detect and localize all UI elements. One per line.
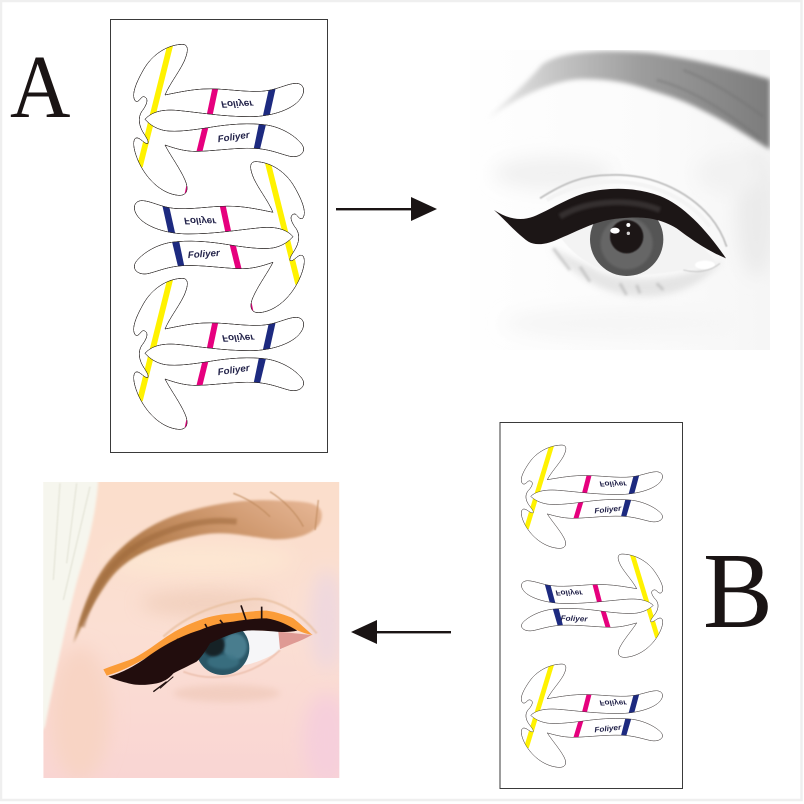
eyelid crease (163, 599, 317, 637)
stencil pair A2 (134, 161, 304, 316)
stencil pair A1: Foliyer (217, 130, 252, 145)
eyelid crease (540, 175, 727, 247)
eyebrow (487, 51, 770, 149)
shading (740, 184, 770, 266)
stencil pair A1 (134, 43, 304, 198)
photo: orange and black eyeliner (40, 480, 350, 787)
stencil pair B1: Foliyer (599, 480, 628, 488)
skin shading (107, 543, 293, 577)
sclera (562, 225, 647, 272)
stencil pair A2: Foliyer (187, 248, 221, 261)
hair (40, 480, 98, 733)
iris (590, 218, 664, 276)
lashes (153, 605, 262, 692)
stencil pair A1: Foliyer (221, 98, 254, 109)
stencil pair B1: Foliyer (594, 504, 623, 515)
lower lashes (553, 248, 663, 295)
photo: black winged eyeliner (470, 50, 777, 350)
iris highlights (610, 223, 630, 235)
letter B: B (703, 532, 773, 651)
arrow: B to orange liner eye (351, 620, 451, 644)
stencil pair B3: Foliyer (599, 698, 628, 708)
stencil pair B2: Foliyer (560, 614, 589, 624)
arrow: A to black liner eye (336, 197, 437, 221)
stencil pair B1 (521, 444, 663, 548)
stencil pair B2: Foliyer (555, 588, 584, 598)
stencil pair A3: Foliyer (222, 332, 255, 343)
letter A: A (10, 37, 71, 137)
panel: stencil sheet B (500, 422, 682, 788)
sclera (243, 630, 283, 666)
lower lid (183, 650, 280, 677)
black liner (108, 618, 297, 685)
stencil pair A2: Foliyer (184, 215, 217, 226)
eyebrow (73, 500, 322, 643)
stencil pair A3: Foliyer (217, 363, 252, 378)
stencil pair B3 (521, 663, 663, 767)
stencil pair B3: Foliyer (594, 723, 623, 734)
iris (198, 631, 250, 675)
orange liner (103, 611, 313, 676)
pink inner corner (278, 632, 312, 649)
panel: stencil sheet A (110, 20, 328, 452)
lower lid shade (558, 251, 716, 298)
stencil pair B2 (521, 553, 663, 657)
stencil pair A3 (134, 277, 304, 432)
winged liner (494, 189, 726, 258)
